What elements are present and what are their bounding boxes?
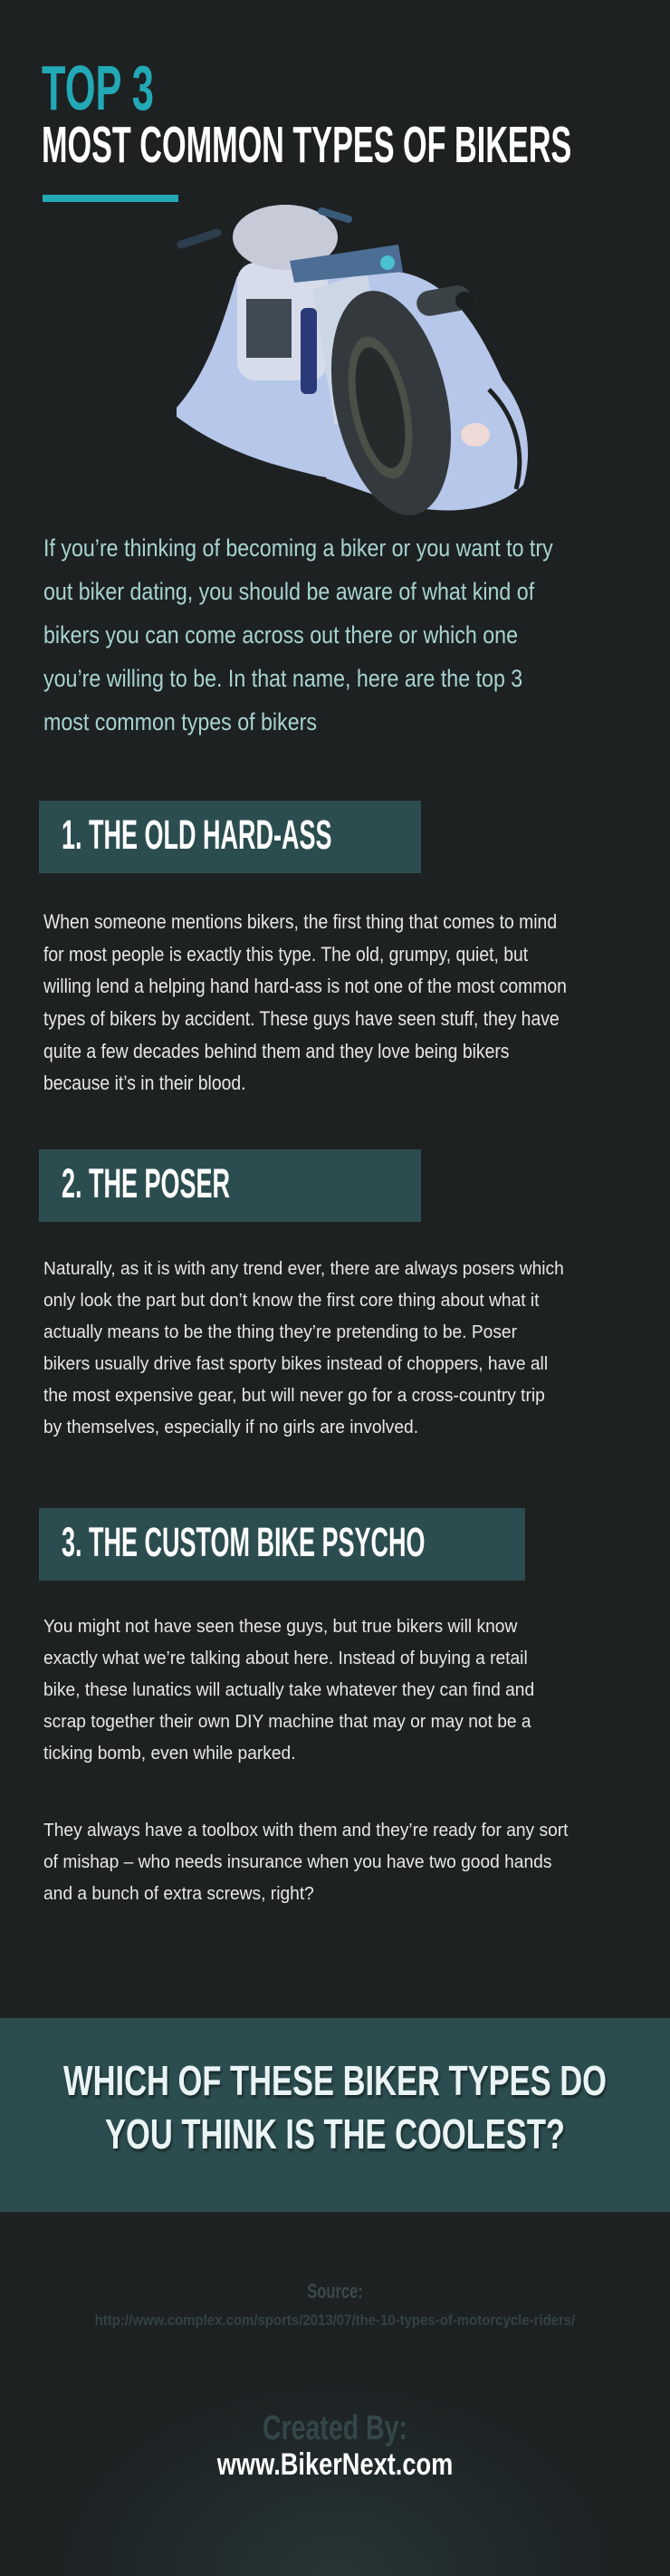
- intro text: bikers you can come across out there or which one: [43, 621, 518, 649]
- callout: question: [0, 2018, 670, 2212]
- text: old hard-ass: willing lend a helping hand hard-ass is not one of the most common: [43, 975, 567, 997]
- text: old hard-ass: [43, 910, 567, 1094]
- text: custom bike psycho: of mishap – who needs insurance when you have two good hands: [43, 1852, 551, 1872]
- credits: [217, 2409, 453, 2482]
- intro text: out biker dating, you should be aware of what kind of: [43, 578, 534, 605]
- intro text: most common types of bikers: [43, 708, 317, 735]
- text: poser: the most expensive gear, but will never go for a cross-country trip: [43, 1386, 545, 1406]
- text: old hard-ass: quite a few decades behind them and they love being bikers: [43, 1040, 509, 1062]
- source: Source:: [307, 2280, 363, 2302]
- text: custom bike psycho: ticking bomb, even while parked.: [43, 1744, 296, 1764]
- text: poser: Naturally, as it is with any trend ever, there are always posers which: [43, 1259, 564, 1279]
- heading: 1. the old hard-ass: [39, 801, 421, 873]
- heading: 2. the poser: 2. THE POSER: [62, 1160, 230, 1206]
- text: custom bike psycho: exactly what we’re talking about here. Instead of buying a retail: [43, 1648, 528, 1668]
- text: custom bike psycho: and a bunch of extra screws, right?: [43, 1884, 314, 1904]
- accent bar: [43, 195, 178, 202]
- illustration: motorcycle: [177, 205, 529, 515]
- text: old hard-ass: for most people is exactly this type. The old, grumpy, quiet, but: [43, 943, 528, 966]
- source: [95, 2280, 575, 2329]
- text: poser: actually means to be the thing they’re pretending to be. Poser: [43, 1322, 517, 1342]
- text: custom bike psycho: They always have a toolbox with them and they’re ready for any sort: [43, 1821, 569, 1841]
- text: custom bike psycho: scrap together their own DIY machine that may or may not be a: [43, 1712, 531, 1732]
- title line 2: MOST COMMON TYPES OF BIKERS: [42, 116, 571, 174]
- callout: question: WHICH OF THESE BIKER TYPES DO: [63, 2057, 607, 2104]
- text: poser: bikers usually drive fast sporty bikes instead of choppers, have all: [43, 1354, 548, 1374]
- text: old hard-ass: When someone mentions bikers, the first thing that comes to mind: [43, 910, 557, 933]
- heading: 1. the old hard-ass: 1. THE OLD HARD-ASS: [62, 812, 332, 858]
- callout: question: YOU THINK IS THE COOLEST?: [105, 2110, 565, 2158]
- intro text: [43, 534, 553, 735]
- credits: www.BikerNext.com: [217, 2447, 453, 2482]
- intro text: If you’re thinking of becoming a biker or you want to try: [43, 534, 553, 562]
- text: poser: only look the part but don’t know the first core thing about what it: [43, 1291, 540, 1311]
- text: poser: [43, 1259, 564, 1437]
- text: old hard-ass: because it’s in their blood.: [43, 1072, 246, 1094]
- credits: Created By:: [263, 2409, 407, 2447]
- title: [42, 53, 571, 174]
- heading: 3. the custom bike psycho: [39, 1508, 525, 1581]
- text: poser: by themselves, especially if no girls are involved.: [43, 1418, 418, 1437]
- intro text: you’re willing to be. In that name, here are the top 3: [43, 665, 522, 692]
- source: http://www.complex.com/sports/2013/07/the-10-types-of-motorcycle-riders/: [95, 2312, 575, 2329]
- bottom glow: [0, 2264, 670, 2576]
- heading: 2. the poser: [39, 1149, 421, 1222]
- text: old hard-ass: types of bikers by accident. These guys have seen stuff, they have: [43, 1007, 560, 1030]
- text: custom bike psycho: [43, 1617, 569, 1904]
- title line 1: TOP 3: [42, 53, 154, 123]
- heading: 3. the custom bike psycho: 3. THE CUSTOM BIKE PSYCHO: [62, 1519, 426, 1565]
- text: custom bike psycho: You might not have seen these guys, but true bikers will know: [43, 1617, 517, 1637]
- text: custom bike psycho: bike, these lunatics will actually take whatever they can find and: [43, 1680, 534, 1700]
